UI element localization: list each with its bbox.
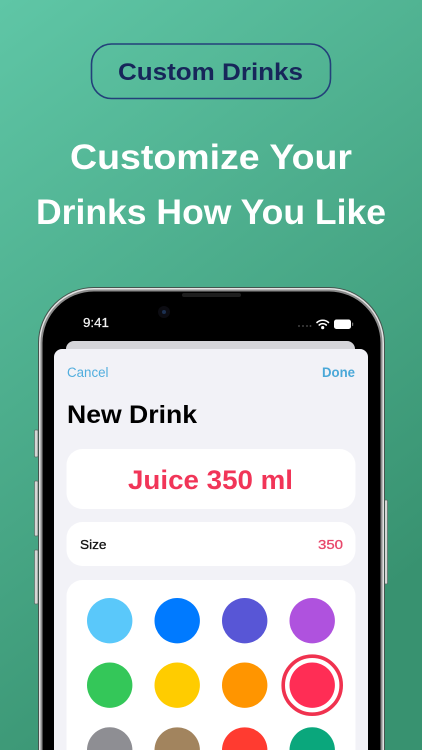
speaker and camera [158, 293, 241, 318]
side buttons [34, 430, 388, 604]
card: size [66, 522, 356, 566]
colour swatches row 1 [87, 598, 335, 643]
colour swatches row 3 [87, 727, 335, 750]
nav: Cancel: Cancel [67, 365, 108, 380]
icon: battery [334, 320, 353, 329]
title: Drinks How You Like [36, 193, 386, 232]
title: Customize Your [70, 138, 352, 177]
phone screen [42, 292, 380, 750]
icon: wifi [317, 320, 328, 328]
card: drink name: Juice 350 ml [128, 465, 293, 495]
signal dots [298, 325, 311, 327]
colour swatches row 2 [87, 656, 341, 714]
phone mockup [34, 287, 388, 750]
card: drink name [66, 449, 356, 509]
badge: Custom Drinks [92, 44, 330, 98]
heading: New Drink: New Drink [67, 401, 197, 429]
status bar [83, 316, 353, 330]
time: 9:41 [83, 316, 109, 330]
back sheet [66, 341, 355, 371]
front sheet [54, 349, 368, 750]
card: colour palette [66, 580, 356, 750]
card: size: 350 [318, 537, 343, 552]
title [36, 138, 386, 232]
badge: Custom Drinks: Custom Drinks [118, 59, 303, 86]
phone frame [38, 287, 385, 750]
nav: Done: Done [322, 365, 355, 380]
card: size: Size [80, 537, 106, 552]
